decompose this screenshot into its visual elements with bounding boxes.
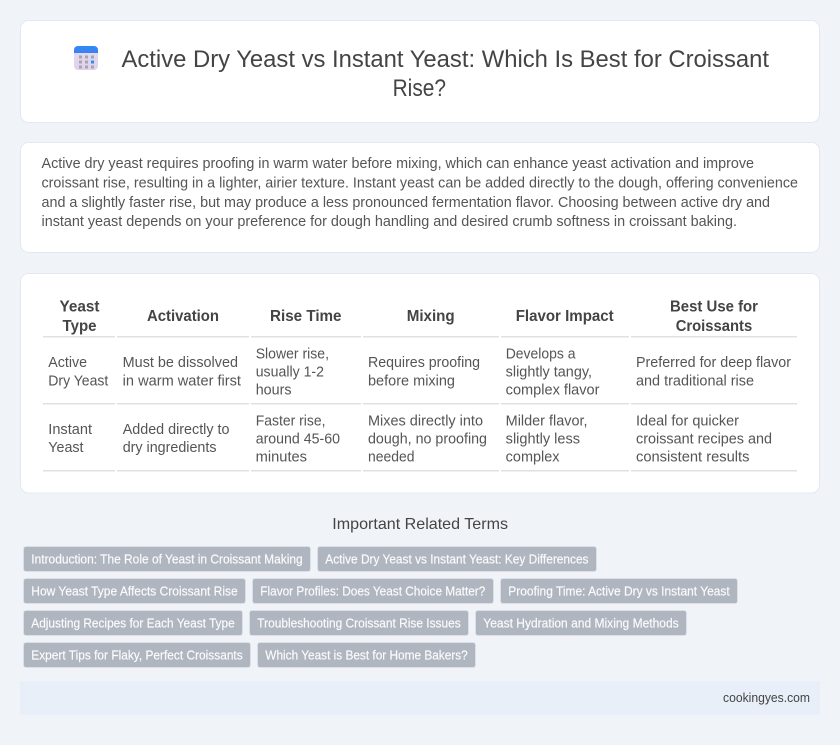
table row: active dry yeast: usually 1-2 bbox=[256, 364, 324, 380]
table header row: Croissants bbox=[676, 318, 752, 335]
table header row: Yeast bbox=[60, 299, 100, 316]
tag: How Yeast Type Affects Croissant Rise bbox=[31, 584, 238, 598]
tag: Adjusting Recipes for Each Yeast Type bbox=[31, 616, 235, 630]
table row: instant yeast: Ideal for quicker bbox=[636, 413, 739, 429]
table row: instant yeast: slightly less bbox=[506, 432, 580, 448]
paragraph text bbox=[42, 156, 798, 230]
table row: active dry yeast: in warm water first bbox=[123, 373, 241, 389]
table row: instant yeast: consistent results bbox=[636, 450, 750, 466]
table row: active dry yeast: hours bbox=[256, 382, 292, 398]
tag bbox=[500, 578, 738, 604]
tag: Active Dry Yeast vs Instant Yeast: Key Differences bbox=[325, 552, 588, 566]
title text bbox=[122, 46, 769, 102]
table header row: Mixing bbox=[407, 308, 455, 325]
paragraph text: Active dry yeast requires proofing in warm water before mixing, which can enhance yeast activation and improve bbox=[42, 156, 754, 172]
tag bbox=[252, 578, 494, 604]
table row: instant yeast: Added directly to bbox=[123, 422, 230, 438]
table row: active dry yeast: slightly tangy, bbox=[506, 364, 592, 380]
table row: active dry yeast: and traditional rise bbox=[636, 373, 754, 389]
table header row: Type bbox=[62, 318, 97, 335]
paragraph text: instant yeast depends on your preference for dough handling and desired crumb softness in croissant baking. bbox=[42, 214, 737, 230]
tag bbox=[24, 546, 310, 572]
footer source text: cookingyes.com bbox=[723, 691, 810, 705]
table row: instant yeast: Mixes directly into bbox=[368, 413, 483, 429]
title text: Rise? bbox=[393, 75, 446, 102]
table row: active dry yeast: Requires proofing bbox=[368, 355, 480, 371]
panel: comparison table bbox=[20, 274, 820, 493]
table row: instant yeast: Milder flavor, bbox=[506, 413, 588, 429]
table row: instant yeast: around 45-60 bbox=[256, 432, 340, 448]
tag: Troubleshooting Croissant Rise Issues bbox=[257, 616, 461, 630]
tag: Proofing Time: Active Dry vs Instant Yeast bbox=[508, 584, 730, 598]
panel: summary paragraph bbox=[20, 142, 820, 252]
table row: active dry yeast bbox=[48, 346, 791, 398]
tag bbox=[318, 546, 596, 572]
title text: Active Dry Yeast vs Instant Yeast: Which Is Best for Croissant bbox=[122, 46, 769, 73]
table header row: Activation bbox=[147, 308, 219, 325]
table row: active dry yeast: Preferred for deep flavor bbox=[636, 355, 791, 371]
table row: instant yeast bbox=[48, 413, 772, 466]
tag: Introduction: The Role of Yeast in Croissant Making bbox=[31, 552, 303, 566]
table row: instant yeast: complex bbox=[506, 450, 560, 466]
tag bbox=[24, 578, 246, 604]
footer bar bbox=[20, 681, 820, 715]
table row: instant yeast: croissant recipes and bbox=[636, 432, 772, 448]
heading: important related terms: Important Related Terms bbox=[332, 516, 508, 533]
paragraph text: croissant rise, resulting in a lighter, airier texture. Instant yeast can be added directly to the dough, offering convenience bbox=[42, 176, 798, 192]
table row: instant yeast: minutes bbox=[256, 450, 307, 466]
tag bbox=[258, 642, 476, 668]
table row: active dry yeast: Slower rise, bbox=[256, 346, 329, 362]
table header row: Rise Time bbox=[270, 308, 342, 325]
table row: active dry yeast: before mixing bbox=[368, 373, 455, 389]
table row: active dry yeast: Dry Yeast bbox=[48, 373, 108, 389]
table header row bbox=[60, 299, 758, 335]
paragraph text: and a slightly faster rise, but may produce a less pronounced fermentation flavor. Choosing between active dry and bbox=[42, 195, 770, 211]
table row: instant yeast: Yeast bbox=[48, 440, 84, 456]
table row: instant yeast: Instant bbox=[48, 422, 92, 438]
panel: title bbox=[20, 20, 820, 122]
tag: Yeast Hydration and Mixing Methods bbox=[483, 616, 679, 630]
table row: instant yeast: dough, no proofing bbox=[368, 432, 487, 448]
tag: Expert Tips for Flaky, Perfect Croissants bbox=[31, 648, 243, 662]
tag bbox=[24, 642, 250, 668]
table header row: Flavor Impact bbox=[516, 308, 614, 325]
table row: active dry yeast: Must be dissolved bbox=[123, 355, 238, 371]
tag bbox=[24, 610, 242, 636]
tag: Which Yeast is Best for Home Bakers? bbox=[265, 648, 468, 662]
table row: instant yeast: needed bbox=[368, 450, 414, 466]
table header row: Best Use for bbox=[670, 299, 758, 316]
table row: active dry yeast: Develops a bbox=[506, 346, 576, 362]
tag bbox=[250, 610, 468, 636]
related term tags bbox=[24, 546, 738, 668]
tag bbox=[476, 610, 686, 636]
table row: active dry yeast: complex flavor bbox=[506, 382, 600, 398]
icon: calendar bbox=[74, 46, 98, 70]
table row: instant yeast: dry ingredients bbox=[123, 440, 216, 456]
tag: Flavor Profiles: Does Yeast Choice Matter? bbox=[260, 584, 485, 598]
table row: active dry yeast: Active bbox=[48, 355, 87, 371]
table row: instant yeast: Faster rise, bbox=[256, 413, 326, 429]
